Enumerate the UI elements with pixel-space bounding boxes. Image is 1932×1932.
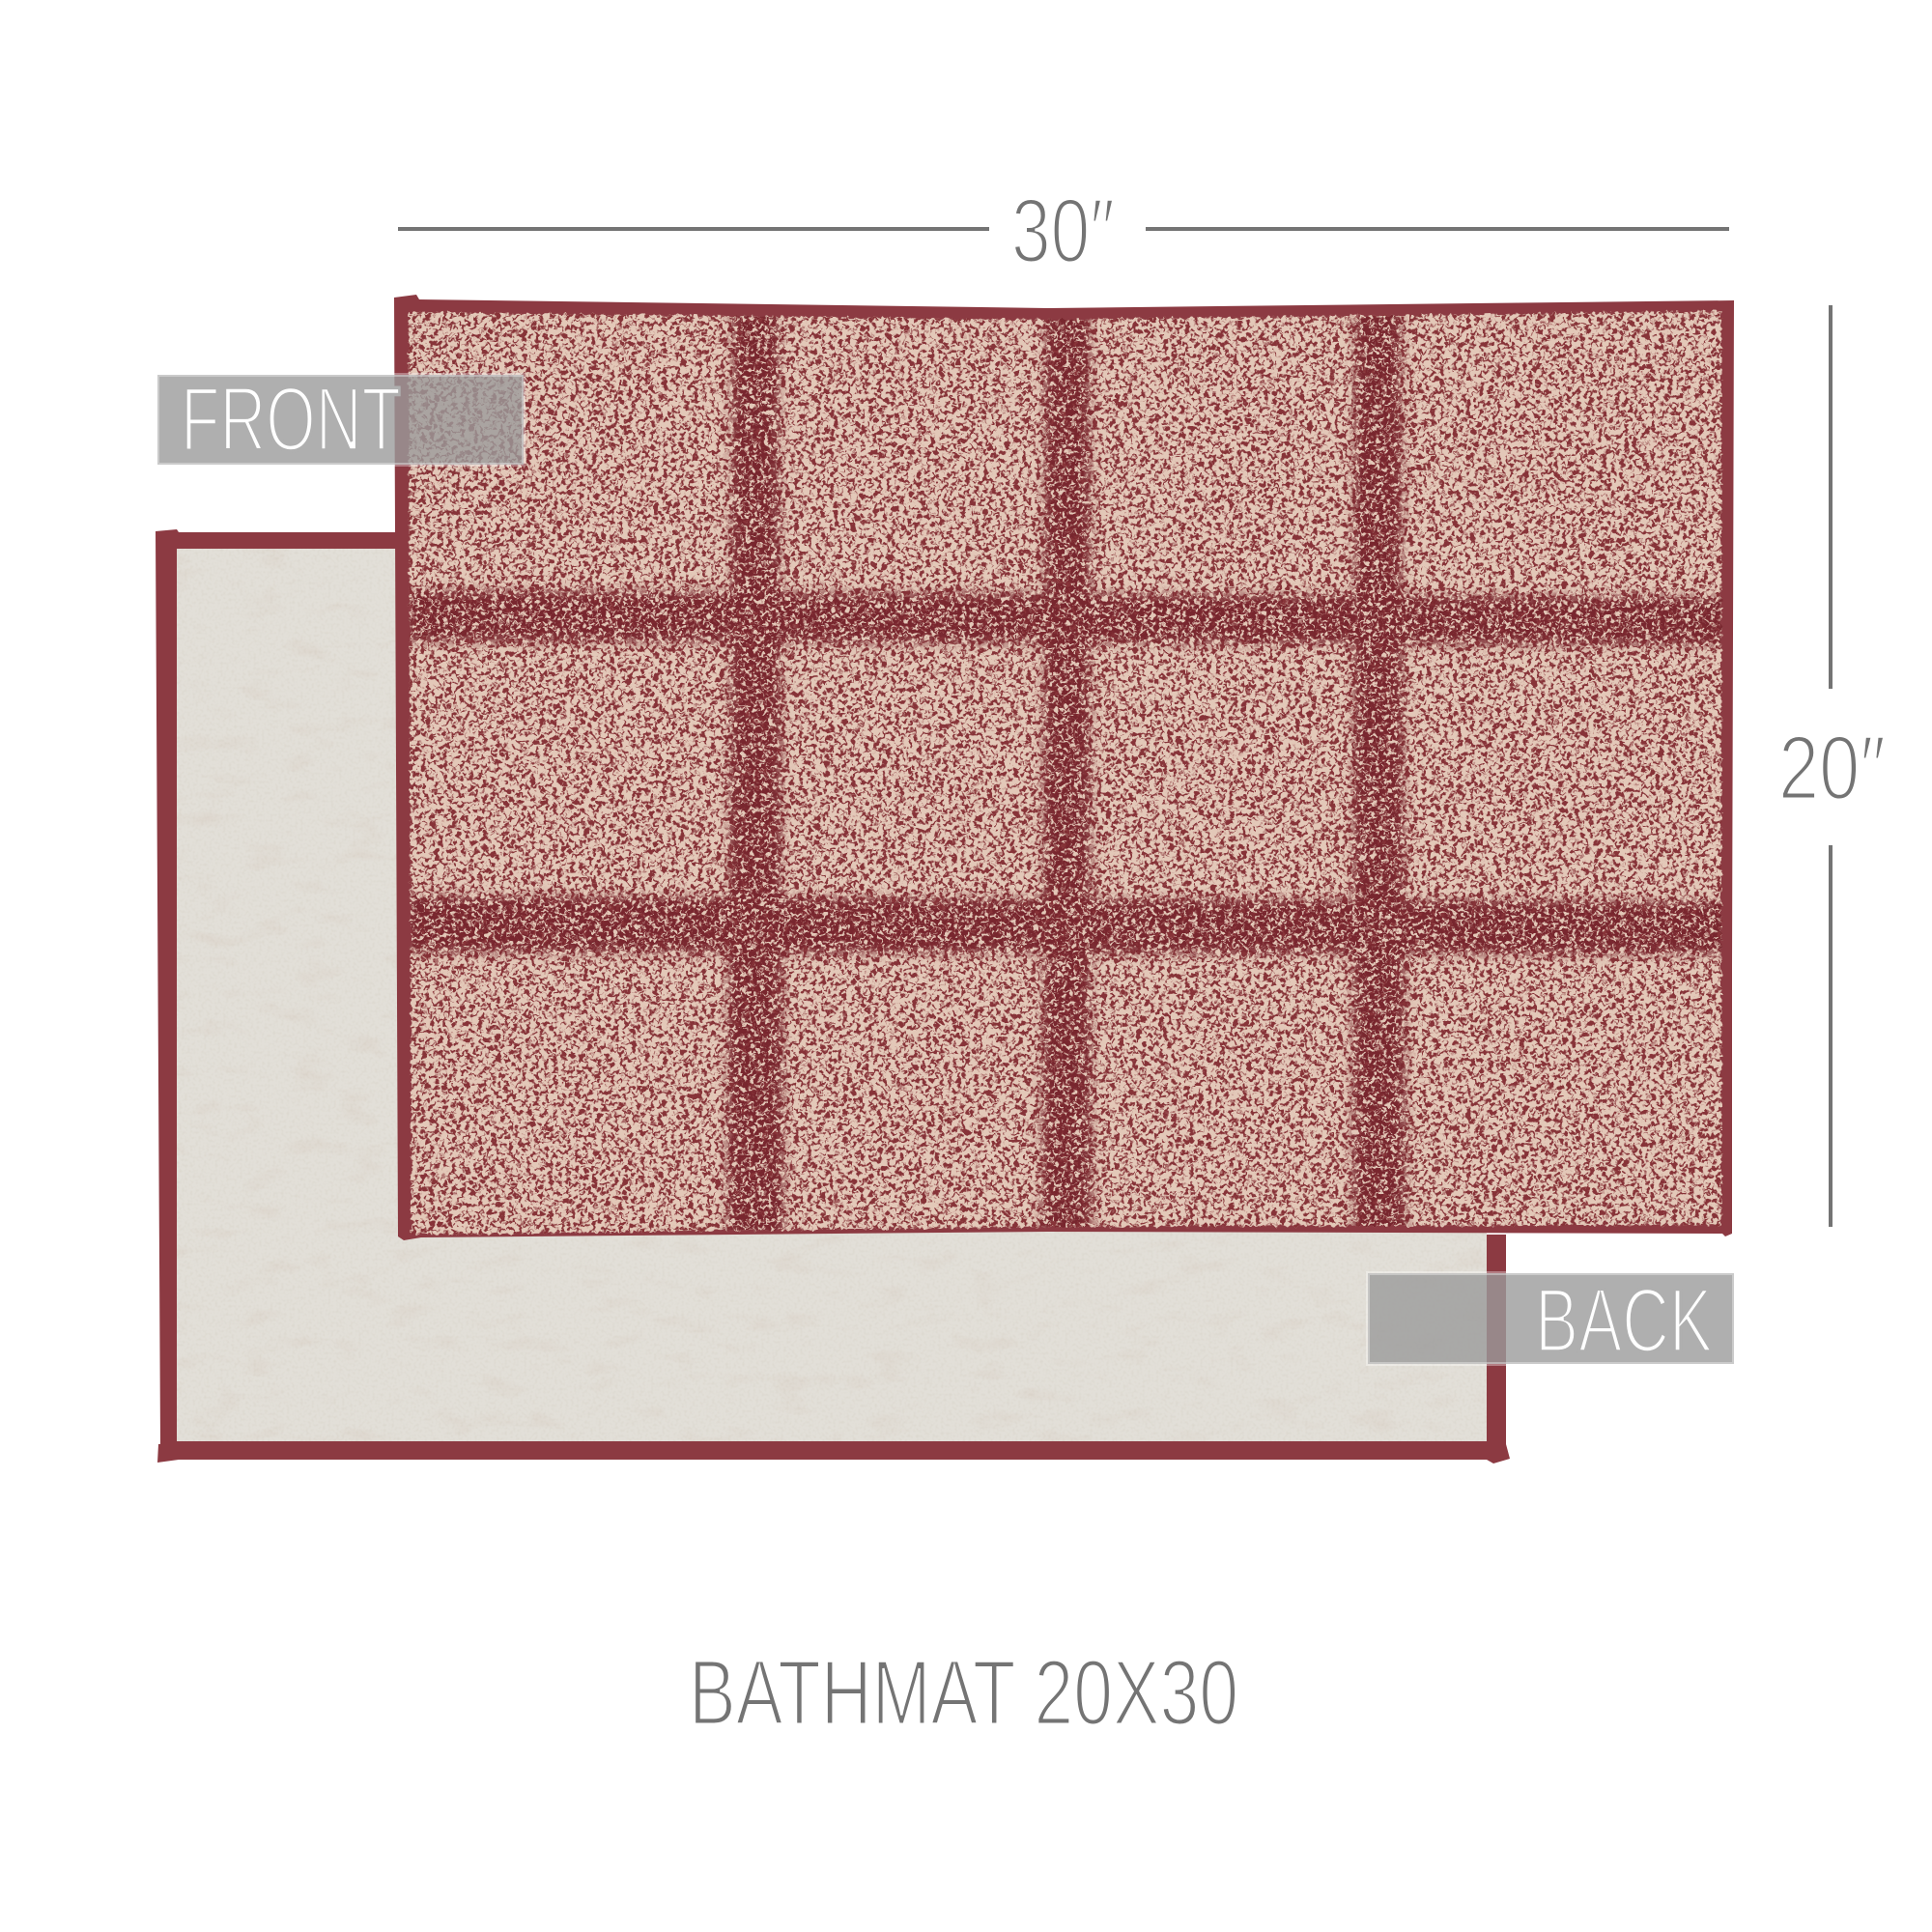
- label: front: FRONT: [181, 368, 401, 469]
- label: back: [1368, 1269, 1734, 1371]
- back cream fabric: [177, 549, 1487, 1441]
- back binding border: [156, 529, 1510, 1463]
- dimension: 20 inch height: [1778, 305, 1886, 1227]
- panel: back of bathmat: [156, 529, 1510, 1463]
- shag pile with plaid: [409, 311, 1722, 1236]
- title: product name: BATHMAT 20X30: [689, 1641, 1238, 1745]
- panel: front of bathmat: [394, 295, 1734, 1240]
- dimension: 30 inch width: [398, 180, 1729, 281]
- front binding border: [394, 295, 1734, 1240]
- dimension: 30 inch width: 30″: [1011, 180, 1115, 281]
- dimension: 20 inch height: 20″: [1778, 717, 1886, 818]
- label: back: BACK: [1535, 1269, 1713, 1371]
